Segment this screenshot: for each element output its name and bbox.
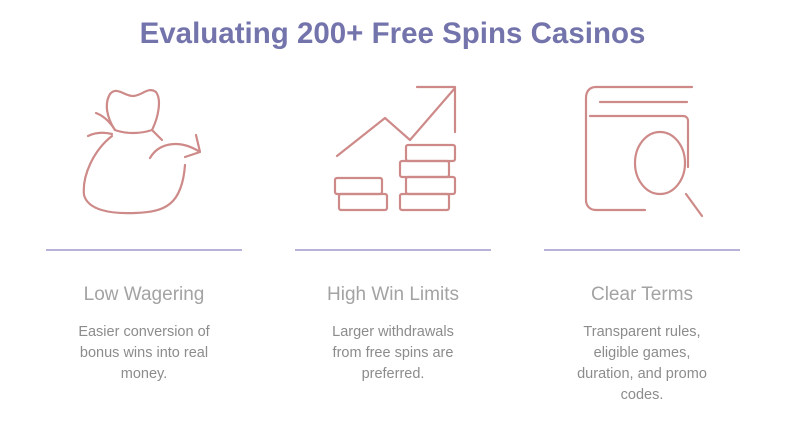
column: high win limits: High Win Limits [327,284,459,305]
icon: book with magnifier [586,87,702,216]
column: low wagering [78,284,210,382]
icon: money bag [84,90,200,213]
column: low wagering: Easier conversion of bonus wins into real money. [78,324,210,382]
column: high win limits [327,284,459,382]
title: Evaluating 200+ Free Spins Casinos [140,17,645,50]
column: high win limits: Larger withdrawals from free spins are preferred. [332,324,454,382]
column: clear terms [577,284,707,403]
column: clear terms: Transparent rules, eligible games, duration, and promo codes. [577,324,707,403]
column: low wagering: Low Wagering [84,284,204,305]
column: clear terms: Clear Terms [591,284,693,305]
icon: growth chart with coins [335,87,455,210]
